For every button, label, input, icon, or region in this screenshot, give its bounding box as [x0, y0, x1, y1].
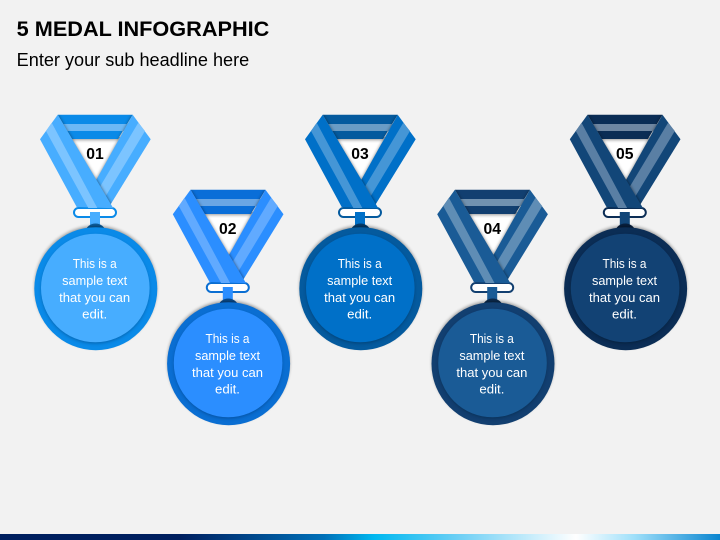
text: that you can [324, 291, 395, 305]
text: that you can [59, 291, 130, 305]
disc shadow [432, 301, 554, 423]
left ribbon shadow [362, 178, 377, 204]
left ribbon [570, 115, 643, 208]
bottom gradient bar [0, 534, 720, 540]
cap [483, 298, 502, 314]
cap [616, 224, 635, 238]
text: This is a [470, 332, 514, 346]
text: This is a [338, 257, 382, 271]
medal 01 [34, 115, 157, 350]
band shadow [600, 137, 650, 142]
ribbon shadows [190, 190, 265, 255]
disc outer [34, 227, 157, 350]
text: This is a [73, 257, 117, 271]
disc inner [174, 309, 282, 417]
disc inner shadow [306, 236, 414, 344]
text: edit. [479, 382, 504, 396]
number: 02 [219, 221, 237, 238]
medal 02 [167, 190, 290, 425]
disc inner shadow [571, 236, 679, 344]
right ribbon [350, 115, 416, 207]
right ribbon [482, 190, 548, 282]
triangle [335, 137, 385, 181]
text: This is a [602, 257, 647, 271]
band shadow [468, 212, 517, 217]
ribbon shadows [456, 190, 530, 254]
disc outer [432, 302, 554, 425]
tab [620, 212, 630, 226]
ring [207, 283, 249, 292]
subtitle: Enter your sub headline here [17, 50, 249, 70]
disc inner [571, 234, 679, 342]
medal 04 [432, 190, 554, 425]
band [455, 190, 530, 214]
text: edit. [347, 308, 372, 322]
text: sample text [459, 349, 525, 363]
tab [355, 212, 365, 226]
disc outer [564, 227, 687, 350]
band shadow [337, 137, 385, 142]
triangle [600, 137, 650, 181]
disc inner [306, 234, 415, 342]
text [456, 332, 527, 396]
medal 05 [564, 115, 687, 350]
disc outer [299, 227, 422, 350]
number: 05 [616, 146, 634, 163]
title: 5 MEDAL INFOGRAPHIC [17, 17, 269, 41]
right ribbon [218, 190, 284, 282]
text: that you can [456, 366, 527, 380]
ring [74, 208, 116, 217]
disc inner [438, 309, 547, 417]
disc inner shadow [438, 310, 546, 418]
ring [339, 208, 381, 217]
band [190, 190, 266, 214]
text: sample text [592, 274, 658, 288]
text: edit. [82, 308, 107, 322]
text: sample text [62, 274, 128, 288]
text [59, 257, 130, 322]
text: edit. [612, 308, 637, 322]
triangle [70, 137, 120, 181]
band [323, 115, 398, 139]
text [324, 257, 395, 322]
medal 03 [299, 115, 422, 350]
tab [223, 287, 233, 301]
band [588, 115, 662, 139]
number: 03 [351, 146, 369, 163]
right ribbon [615, 115, 680, 207]
left ribbon shadow [626, 178, 642, 204]
cap [351, 224, 370, 238]
text: that you can [192, 366, 263, 380]
band [58, 115, 133, 139]
band shadow [204, 212, 253, 217]
text [192, 332, 263, 396]
number: 04 [483, 221, 501, 238]
ring [604, 208, 646, 217]
number: 01 [86, 146, 104, 163]
left ribbon [173, 190, 246, 283]
triangle [467, 212, 517, 256]
text: that you can [589, 291, 660, 305]
tab [90, 212, 100, 226]
cap [86, 224, 105, 238]
disc shadow [300, 226, 422, 348]
left ribbon [437, 190, 510, 283]
left ribbon [305, 115, 378, 208]
disc inner shadow [41, 236, 149, 344]
text: sample text [327, 274, 393, 288]
text: edit. [215, 382, 240, 396]
left ribbon shadow [494, 253, 509, 279]
ribbon shadows [58, 114, 132, 180]
disc outer [167, 302, 290, 425]
disc shadow [35, 226, 157, 348]
cap [219, 298, 238, 314]
text: This is a [206, 332, 250, 346]
ribbon shadows [588, 115, 662, 180]
disc inner shadow [174, 310, 282, 418]
text: sample text [195, 349, 261, 363]
tab [487, 287, 497, 301]
left ribbon [40, 115, 113, 208]
disc shadow [565, 226, 687, 348]
ring [471, 283, 513, 292]
band shadow [72, 137, 120, 142]
text [589, 257, 660, 322]
disc shadow [168, 301, 290, 423]
disc inner [41, 234, 150, 342]
ribbon shadows [323, 114, 398, 180]
left ribbon shadow [96, 178, 112, 204]
left ribbon shadow [229, 252, 245, 279]
right ribbon [85, 115, 151, 207]
triangle [203, 212, 253, 256]
